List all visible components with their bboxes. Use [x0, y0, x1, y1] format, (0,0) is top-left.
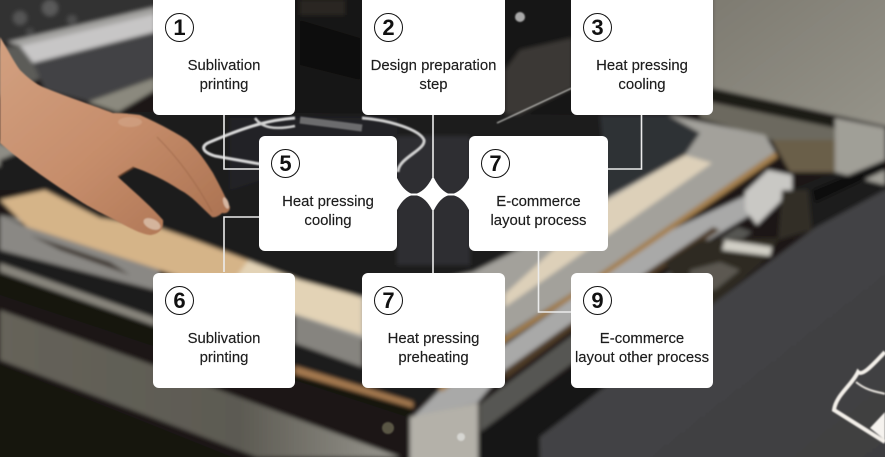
step number 7 — [374, 286, 403, 315]
silver side of platen — [413, 175, 792, 417]
step number 6: 6 — [173, 288, 186, 313]
step number 5: 5 — [279, 151, 292, 176]
step number 1 — [165, 13, 194, 42]
lower right shirt — [540, 190, 885, 457]
step 1 label: Sublivation — [188, 58, 260, 74]
step 9 label — [575, 331, 709, 366]
top left machine — [0, 0, 155, 50]
shirt print lines — [204, 118, 295, 164]
step 5 label: cooling — [304, 212, 352, 228]
step number 3 — [583, 13, 612, 42]
step 1 label — [188, 58, 260, 92]
step number 3: 3 — [591, 15, 604, 40]
panel: step 5 — [259, 136, 397, 251]
step 3 label: Heat pressing — [596, 58, 688, 74]
step number 2 — [374, 13, 403, 42]
panel: step 3 — [571, 0, 713, 115]
step number 9 — [583, 286, 612, 315]
preheating label — [388, 331, 479, 366]
bottom right print — [834, 352, 885, 442]
preheating label: Heat pressing — [388, 331, 479, 347]
e-commerce layout label: E-commerce — [496, 194, 581, 210]
step 2 label — [371, 58, 496, 92]
step number 2: 2 — [382, 15, 395, 40]
panel: step 7 e-commerce — [469, 136, 608, 251]
step number 9: 9 — [591, 288, 604, 313]
platen grey — [0, 115, 775, 339]
panel: step 2 — [362, 0, 505, 115]
step 2 label: Design preparation — [371, 58, 496, 74]
step number 7: 7 — [489, 151, 502, 176]
silver edge highlight — [497, 88, 572, 123]
step 5 label — [282, 194, 374, 228]
step 6 label: Sublivation — [188, 331, 260, 347]
panel: step 9 — [571, 273, 713, 388]
step 5 label: Heat pressing — [282, 194, 374, 210]
left grey foam and dark bands — [0, 215, 160, 290]
step number 7 — [481, 149, 510, 178]
screws — [382, 422, 394, 434]
e-commerce layout label — [490, 194, 586, 228]
step 2 label: step — [419, 76, 448, 92]
hand — [0, 37, 230, 235]
step 1 label: printing — [200, 76, 248, 92]
e-commerce layout label: layout process — [490, 212, 586, 228]
step number 5 — [271, 149, 300, 178]
top right wall — [712, 0, 885, 128]
preheating label: preheating — [398, 350, 469, 366]
lower right hardware — [665, 238, 780, 310]
step number 6 — [165, 286, 194, 315]
step 6 label — [188, 331, 260, 366]
step 9 label: layout other process — [575, 350, 709, 366]
black shirt — [0, 112, 608, 297]
step number 1: 1 — [173, 15, 186, 40]
panel: step 7 preheating — [362, 273, 505, 388]
step 3 label — [596, 58, 688, 92]
step number 7: 7 — [382, 288, 395, 313]
paper strips — [0, 190, 362, 335]
post and beam — [0, 310, 400, 457]
step 3 label: cooling — [618, 76, 666, 92]
centre star connector — [397, 178, 469, 210]
step 6 label: printing — [200, 350, 248, 366]
top centre press — [295, 0, 575, 120]
panel: step 6 — [153, 273, 295, 388]
panel: step 1 — [153, 0, 295, 115]
step 9 label: E-commerce — [600, 331, 684, 347]
